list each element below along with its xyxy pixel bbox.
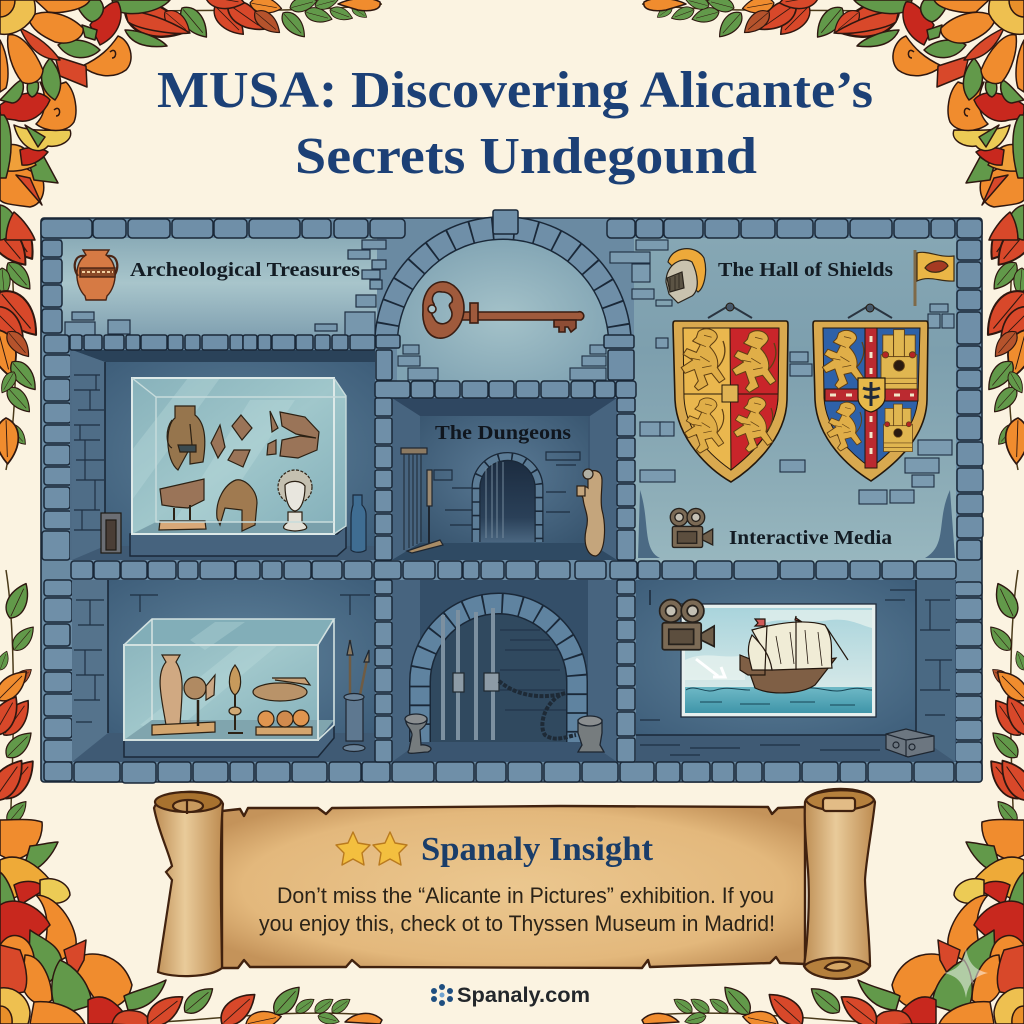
centre left column bbox=[375, 398, 392, 762]
shelf rows and columns of bricks bbox=[44, 335, 982, 783]
vessel on stand bbox=[152, 675, 215, 735]
case frame bbox=[132, 378, 346, 534]
floral corner: bottom right bbox=[642, 570, 1024, 1024]
left column of bricks bbox=[42, 240, 74, 762]
screen: ship film bbox=[681, 604, 876, 717]
upper left shelf bbox=[70, 335, 375, 350]
ship bbox=[740, 616, 848, 693]
heading: Spanaly Insight: Spanaly Insight bbox=[421, 831, 654, 868]
footer logo bbox=[431, 984, 590, 1007]
shield: blue with castles bbox=[813, 304, 928, 481]
stone bollards bbox=[405, 714, 604, 753]
icon: snowflake mark bbox=[431, 984, 453, 1006]
case base bbox=[130, 526, 346, 556]
display case: antiquities bbox=[130, 378, 346, 556]
title: MUSA: Discovering Alicante’s bbox=[157, 62, 873, 119]
floral corner: bottom left bbox=[0, 570, 382, 1024]
icon: film camera large bbox=[660, 600, 714, 650]
brick rows and columns bbox=[41, 219, 983, 762]
iron chest bbox=[886, 729, 934, 757]
scroll sheet bbox=[222, 806, 805, 968]
spears in holder bbox=[343, 640, 369, 752]
marble bust bbox=[278, 470, 312, 531]
helmet bbox=[167, 406, 205, 470]
site name: Spanaly.com bbox=[457, 984, 590, 1007]
room: Archeological Treasures header bbox=[62, 238, 386, 338]
glass bbox=[132, 378, 346, 534]
vase bbox=[160, 655, 182, 726]
rubble at alcove foot bbox=[398, 345, 606, 380]
bowl fragments bbox=[253, 678, 312, 735]
artifact on stand bbox=[159, 479, 206, 530]
lock plates bbox=[453, 673, 499, 692]
display case: ceramics bbox=[124, 619, 334, 757]
keystone bbox=[493, 210, 518, 234]
room: upper dungeon bbox=[392, 398, 617, 560]
shield: quartered gold and red bbox=[673, 303, 788, 482]
floral corner: top left bbox=[0, 0, 382, 470]
wooden figure bbox=[577, 469, 604, 556]
lantern box bbox=[101, 513, 121, 553]
iron rack and tools bbox=[401, 448, 443, 553]
room: right lower gallery bbox=[636, 580, 956, 762]
case base bbox=[124, 725, 334, 757]
label: Interactive Media: Interactive Media bbox=[729, 527, 892, 549]
icon: amphora bbox=[75, 250, 117, 300]
arch: brick ring bbox=[386, 228, 620, 345]
doorway with bars bbox=[476, 457, 539, 542]
icon: two gold stars bbox=[336, 832, 407, 865]
icon: film camera small bbox=[670, 508, 713, 547]
room: Hall of Shields and Interactive Media bbox=[610, 238, 956, 563]
chain bbox=[499, 681, 576, 739]
icon: yellow banner bbox=[915, 250, 954, 306]
room: left lower gallery bbox=[72, 580, 375, 762]
case frame bbox=[124, 619, 334, 740]
label: Archeological Treasures: Archeological Treasures bbox=[130, 259, 360, 281]
icon: bronze key bbox=[423, 282, 584, 338]
room: key alcove bbox=[397, 236, 609, 383]
goblet bbox=[228, 665, 243, 733]
helmet fragment bbox=[217, 480, 257, 531]
cell interior bbox=[430, 614, 566, 742]
museum cross-section bbox=[41, 210, 983, 783]
title: Secrets Undegound bbox=[295, 128, 757, 185]
brick arch bbox=[420, 604, 577, 742]
icon: knight helmet bbox=[666, 249, 706, 303]
top row of bricks bbox=[41, 219, 982, 238]
title bbox=[157, 62, 873, 185]
floral corner: top right bbox=[642, 0, 1024, 470]
wall base bbox=[41, 218, 982, 782]
label: The Hall of Shields: The Hall of Shields bbox=[718, 259, 893, 281]
left roller bbox=[154, 792, 223, 976]
right column of bricks bbox=[955, 240, 983, 762]
glass bbox=[124, 619, 334, 740]
watermark sparkle bbox=[944, 948, 988, 998]
centre right column bbox=[617, 398, 635, 762]
insight body text bbox=[259, 883, 775, 936]
insight body text: you enjoy this, check ot to Thyssen Museum in Madrid! bbox=[259, 911, 775, 936]
iron bars bbox=[443, 608, 493, 740]
pottery shards bbox=[211, 411, 319, 467]
long shelf between floors bbox=[71, 561, 956, 579]
centre shelf over upper dungeon bbox=[375, 335, 636, 398]
blue bottle bbox=[351, 495, 366, 552]
right roller bbox=[804, 789, 875, 979]
insight body text: Don’t miss the “Alicante in Pictures” exhibition. If you bbox=[277, 883, 774, 908]
room: lower dungeon bbox=[392, 580, 617, 762]
room: left middle gallery bbox=[70, 350, 375, 560]
pointer arrow bbox=[696, 659, 725, 677]
label: The Dungeons: The Dungeons bbox=[435, 422, 571, 444]
bottom row of bricks bbox=[44, 762, 982, 783]
parchment scroll bbox=[154, 789, 875, 979]
